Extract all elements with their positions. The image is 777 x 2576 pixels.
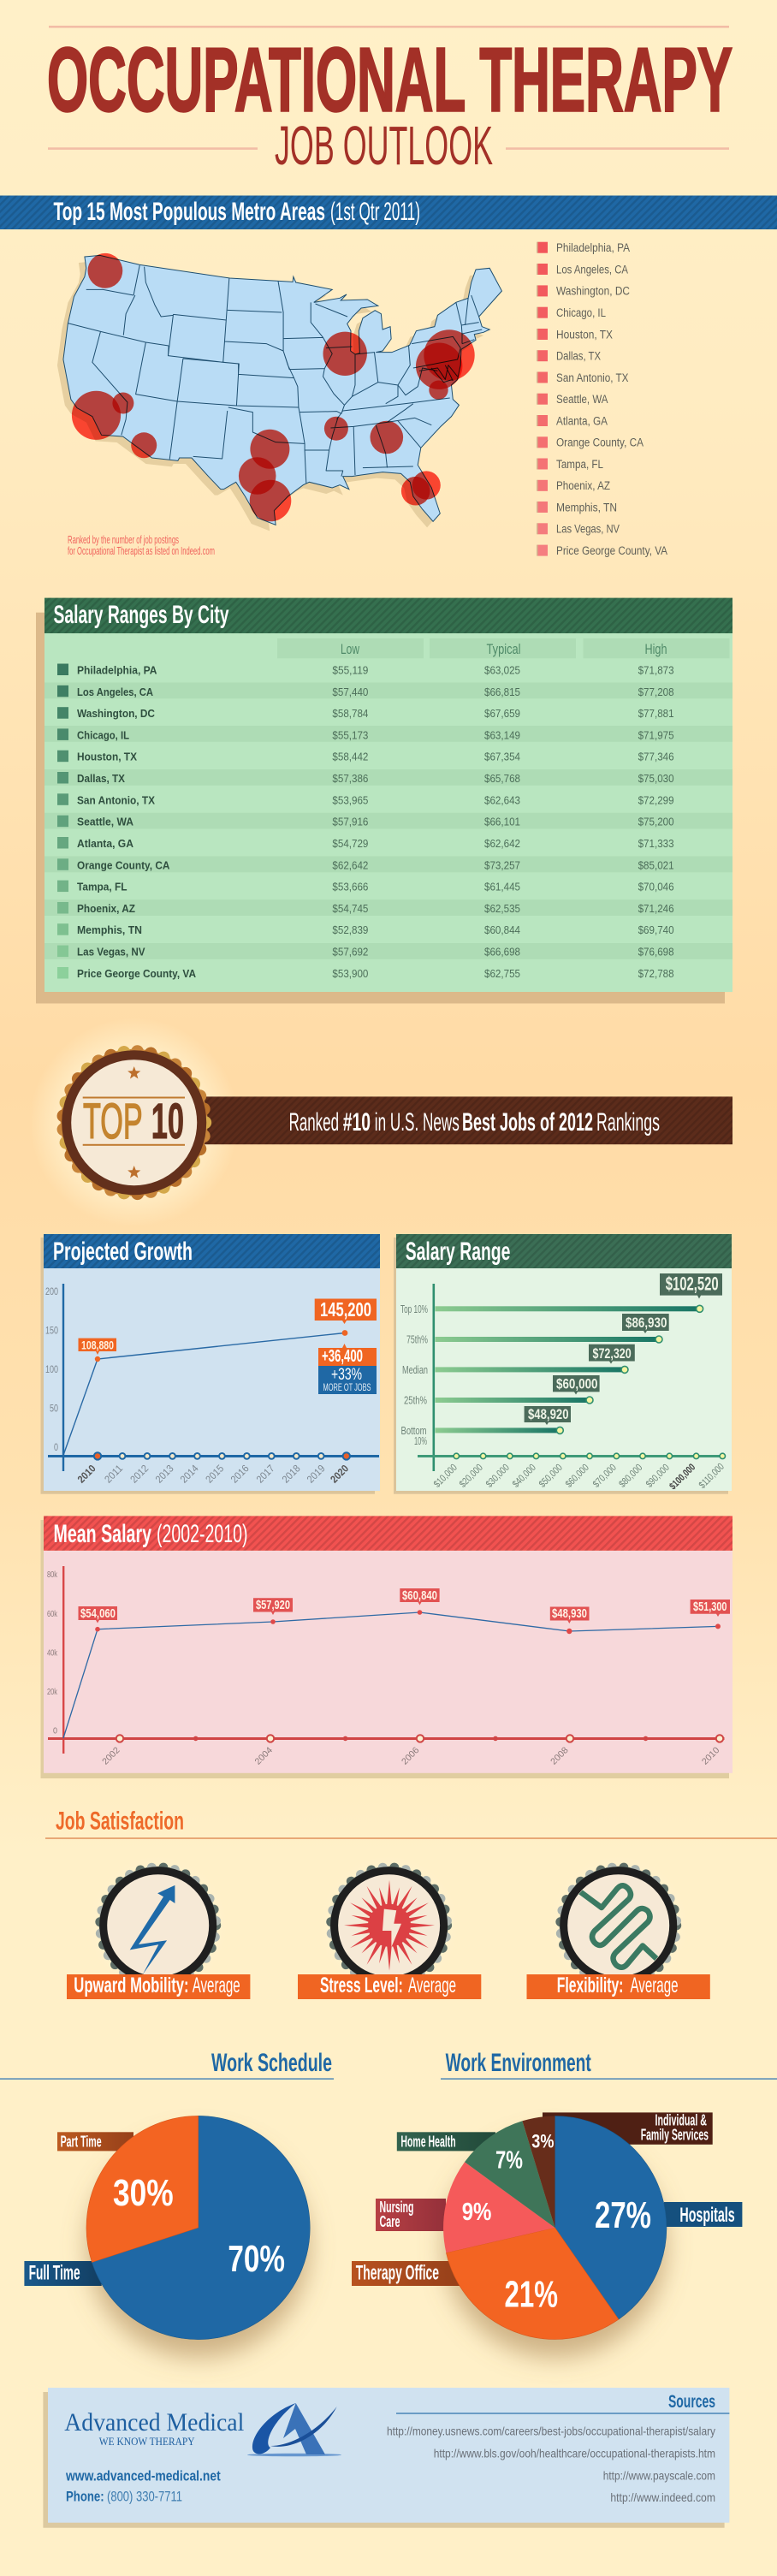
map footnote: for Occupational Therapist as listed on Indeed.com bbox=[68, 545, 215, 557]
label: home health: Home Health bbox=[400, 2134, 456, 2151]
label: therapy office: Therapy Office bbox=[356, 2262, 439, 2285]
callout: +36,400 and +33%: +36,400 bbox=[322, 1347, 363, 1366]
callout: $72,320 bbox=[589, 1344, 635, 1364]
callout: $86,930 bbox=[622, 1314, 669, 1333]
city legend: Dallas, TX bbox=[556, 349, 601, 363]
banner: ranked #10: #10 bbox=[343, 1108, 371, 1137]
table rows: $54,745 bbox=[332, 902, 368, 915]
title: JOB OUTLOOK bbox=[275, 115, 493, 176]
heading: job satisfaction: Job Satisfaction bbox=[56, 1807, 184, 1835]
bar chart: salary percentiles: 75th% bbox=[406, 1333, 428, 1345]
line chart: projected growth: 150 bbox=[45, 1325, 58, 1337]
pie chart: work environment: 9% bbox=[462, 2199, 492, 2226]
pie chart: work environment bbox=[352, 2112, 742, 2358]
callout: $48,930 bbox=[550, 1607, 589, 1623]
table rows: $67,354 bbox=[484, 751, 520, 763]
icon: upward lightning arrow bbox=[130, 1885, 175, 1974]
city legend: San Antonio, TX bbox=[556, 371, 628, 384]
city legend: Houston, TX bbox=[556, 328, 613, 341]
logo: advanced medical: WE KNOW THERAPY bbox=[99, 2436, 195, 2448]
city legend bbox=[537, 241, 667, 557]
callout: $102,520 bbox=[660, 1273, 722, 1299]
table rows: Phoenix, AZ bbox=[77, 902, 135, 915]
table rows: Atlanta, GA bbox=[77, 837, 134, 850]
city legend: Chicago, IL bbox=[556, 306, 606, 319]
line chart: projected growth: 2014 bbox=[178, 1463, 201, 1486]
slice: home health 7% bbox=[465, 2121, 555, 2228]
table rows: Las Vegas, NV bbox=[77, 946, 145, 959]
banner: ranked #10: Ranked bbox=[289, 1108, 339, 1137]
table rows: $57,440 bbox=[332, 686, 368, 698]
bar chart: salary percentiles: $60,000 bbox=[564, 1463, 591, 1490]
callout: $48,920 bbox=[525, 1406, 571, 1425]
table column headers bbox=[277, 638, 729, 658]
table column headers: High bbox=[645, 641, 667, 657]
icon: red starburst with bolt bbox=[344, 1880, 435, 1971]
logo: advanced medical bbox=[64, 2403, 341, 2456]
table rows: $54,729 bbox=[332, 837, 368, 850]
table rows: $72,788 bbox=[638, 967, 674, 980]
heading: work schedule: Work Schedule bbox=[211, 2049, 332, 2077]
line chart: mean salary: 60k bbox=[47, 1609, 58, 1619]
heading: projected growth bbox=[44, 1234, 380, 1268]
table rows: $77,346 bbox=[638, 751, 674, 763]
pie chart: work environment: 21% bbox=[505, 2273, 558, 2315]
callout: $72,320: $72,320 bbox=[592, 1345, 632, 1362]
panel: projected growth bbox=[41, 1234, 380, 1494]
heading: mean salary: (2002-2010) bbox=[157, 1520, 248, 1548]
table rows: Orange County, CA bbox=[77, 858, 170, 871]
label: stress level bbox=[298, 1974, 481, 1999]
label: flexibility bbox=[527, 1974, 710, 1999]
banner: ranked #10 bbox=[171, 1096, 733, 1144]
label: individual and family services: Individual & bbox=[655, 2112, 707, 2129]
bar chart: salary percentiles: $10,000 bbox=[432, 1463, 460, 1490]
table rows: $72,299 bbox=[638, 793, 674, 806]
pie chart: work schedule bbox=[24, 2116, 310, 2358]
bar chart: salary percentiles: $20,000 bbox=[458, 1463, 485, 1490]
table rows: $53,900 bbox=[332, 967, 368, 980]
table rows bbox=[44, 664, 733, 980]
line chart: projected growth: 2013 bbox=[153, 1463, 176, 1486]
table rows: $71,975 bbox=[638, 728, 674, 741]
table column headers: Typical bbox=[486, 641, 520, 657]
table rows: $75,200 bbox=[638, 816, 674, 828]
line chart: projected growth: 2020 bbox=[328, 1463, 351, 1486]
callout: 108,880 bbox=[79, 1338, 116, 1355]
line chart: projected growth: 2019 bbox=[305, 1463, 328, 1486]
contact details: (800) 330-7711 bbox=[107, 2488, 182, 2504]
label: nursing care: Nursing bbox=[380, 2199, 414, 2216]
table rows: $73,257 bbox=[484, 858, 520, 871]
table column headers: Low bbox=[341, 641, 360, 657]
badge: top 10: TOP bbox=[83, 1094, 143, 1149]
slice: individual and family services 3% bbox=[522, 2116, 555, 2228]
logo: advanced medical: Advanced Medical bbox=[64, 2408, 244, 2437]
table rows: $58,442 bbox=[332, 751, 368, 763]
callout: $54,060: $54,060 bbox=[80, 1607, 116, 1621]
slice: part time 30% bbox=[86, 2116, 199, 2262]
table rows: $62,642 bbox=[332, 858, 368, 871]
table rows: $66,101 bbox=[484, 816, 520, 828]
bar chart: salary percentiles: Median bbox=[402, 1363, 428, 1376]
line chart: projected growth: 2010 bbox=[75, 1463, 98, 1486]
line chart: projected growth: 0 bbox=[54, 1441, 58, 1453]
table rows: $62,643 bbox=[484, 793, 520, 806]
table rows: $71,873 bbox=[638, 664, 674, 676]
city legend: Atlanta, GA bbox=[556, 414, 608, 427]
sources list: http://www.bls.gov/ooh/healthcare/occupational-therapists.htm bbox=[434, 2446, 715, 2460]
table rows: $53,965 bbox=[332, 793, 368, 806]
label: flexibility: Average bbox=[630, 1974, 678, 1997]
sources list: http://money.usnews.com/careers/best-jobs/occupational-therapist/salary bbox=[387, 2424, 715, 2437]
line chart: mean salary: 20k bbox=[47, 1687, 58, 1697]
table rows: Chicago, IL bbox=[77, 728, 129, 741]
line chart: projected growth: 2016 bbox=[228, 1463, 252, 1486]
pie chart: work environment: 3% bbox=[531, 2130, 554, 2152]
callout: +36,400 and +33%: MORE OT JOBS bbox=[323, 1381, 371, 1393]
heading: top 15 metro areas band: Top 15 Most Populous Metro Areas bbox=[53, 198, 325, 226]
bar chart: salary percentiles: $40,000 bbox=[511, 1463, 538, 1490]
callout: $48,920: $48,920 bbox=[528, 1406, 568, 1422]
city legend: Los Angeles, CA bbox=[556, 263, 628, 276]
table rows: $61,445 bbox=[484, 881, 520, 893]
bar chart: salary percentiles: $100,000 bbox=[668, 1463, 697, 1492]
table rows: Price George County, VA bbox=[77, 967, 197, 980]
bar chart: salary percentiles bbox=[400, 1284, 727, 1492]
slice: full time 70% bbox=[92, 2116, 310, 2340]
table rows: $52,839 bbox=[332, 923, 368, 936]
table rows: $85,021 bbox=[638, 858, 674, 871]
city legend: Philadelphia, PA bbox=[556, 241, 630, 254]
map footnote: Ranked by the number of job postings bbox=[68, 534, 179, 546]
table rows: $55,173 bbox=[332, 728, 368, 741]
callout: 145,200: 145,200 bbox=[320, 1298, 371, 1321]
table rows: $53,666 bbox=[332, 881, 368, 893]
line chart: mean salary: 2004 bbox=[253, 1745, 275, 1767]
callout: 108,880: 108,880 bbox=[81, 1338, 114, 1352]
badge: top 10: 10 bbox=[151, 1094, 184, 1149]
table rows: $77,881 bbox=[638, 707, 674, 720]
callout: $51,300: $51,300 bbox=[693, 1600, 727, 1614]
callout: +36,400 and +33% bbox=[318, 1344, 377, 1394]
bar chart: salary percentiles: $110,000 bbox=[697, 1462, 727, 1491]
bar chart: salary percentiles: $70,000 bbox=[591, 1463, 619, 1490]
table rows: $77,208 bbox=[638, 686, 674, 698]
city legend: Price George County, VA bbox=[556, 544, 667, 557]
label: hospitals: Hospitals bbox=[679, 2204, 735, 2227]
slice: therapy office 21% bbox=[446, 2228, 619, 2339]
callout: $57,920: $57,920 bbox=[256, 1599, 290, 1612]
panel: mean salary bbox=[41, 1516, 733, 1778]
label: individual and family services bbox=[543, 2112, 713, 2145]
banner: ranked #10: Rankings bbox=[596, 1108, 660, 1137]
heading: top 15 metro areas band bbox=[0, 195, 777, 229]
label: stress level: Average bbox=[408, 1974, 456, 1997]
line chart: mean salary: 2002 bbox=[100, 1745, 122, 1767]
table rows: Los Angeles, CA bbox=[77, 686, 154, 698]
label: individual and family services: Family Services bbox=[641, 2126, 709, 2143]
city legend: Phoenix, AZ bbox=[556, 479, 610, 492]
heading: mean salary: Mean Salary bbox=[53, 1520, 151, 1548]
panel: footer with logo and sources bbox=[43, 2388, 729, 2528]
contact details: Phone: bbox=[66, 2488, 104, 2504]
table rows: $76,698 bbox=[638, 946, 674, 959]
city legend: Tampa, FL bbox=[556, 458, 603, 471]
label: stress level: Stress Level: bbox=[320, 1974, 403, 1997]
bar chart: salary percentiles: 10% bbox=[414, 1434, 427, 1447]
label: therapy office bbox=[352, 2261, 460, 2286]
bar chart: salary percentiles: Top 10% bbox=[400, 1303, 428, 1315]
city legend: Orange County, CA bbox=[556, 436, 644, 449]
table rows: $62,535 bbox=[484, 902, 520, 915]
heading: work environment: Work Environment bbox=[446, 2049, 591, 2077]
callout: $102,520: $102,520 bbox=[666, 1273, 719, 1294]
callout: $48,930: $48,930 bbox=[552, 1607, 587, 1621]
pie chart: work environment: 27% bbox=[595, 2194, 651, 2236]
badge: stress level bbox=[319, 1855, 460, 1996]
line chart: projected growth bbox=[45, 1284, 379, 1486]
bar chart: salary percentiles: $50,000 bbox=[537, 1463, 565, 1490]
label: upward mobility: Average bbox=[193, 1974, 240, 1997]
callout: $60,840 bbox=[400, 1588, 440, 1606]
line chart: projected growth: 50 bbox=[50, 1402, 58, 1414]
banner: ranked #10: in U.S. News bbox=[375, 1108, 460, 1137]
bar chart: salary percentiles: $90,000 bbox=[644, 1463, 672, 1490]
line chart: projected growth: 2012 bbox=[128, 1463, 151, 1486]
table rows: Philadelphia, PA bbox=[77, 664, 157, 676]
line chart: mean salary: 0 bbox=[53, 1725, 57, 1736]
table rows: Dallas, TX bbox=[77, 772, 125, 785]
slice: nursing care 9% bbox=[443, 2162, 555, 2253]
table rows: $69,740 bbox=[638, 923, 674, 936]
city legend: Las Vegas, NV bbox=[556, 523, 620, 536]
table rows: Washington, DC bbox=[77, 707, 156, 720]
table rows: $70,046 bbox=[638, 881, 674, 893]
label: upward mobility: Upward Mobility: bbox=[74, 1974, 189, 1997]
pie chart: work environment: 7% bbox=[495, 2146, 523, 2174]
sources list: http://www.indeed.com bbox=[610, 2490, 715, 2504]
label: hospitals bbox=[664, 2202, 742, 2227]
line chart: projected growth: 2018 bbox=[280, 1463, 303, 1486]
table rows: $57,916 bbox=[332, 816, 368, 828]
label: part time: Part Time bbox=[61, 2134, 102, 2151]
callout: $60,000: $60,000 bbox=[556, 1376, 597, 1392]
line chart: projected growth: 100 bbox=[45, 1363, 58, 1375]
line chart: projected growth: 2011 bbox=[102, 1463, 125, 1486]
line chart: projected growth: 2017 bbox=[254, 1463, 277, 1486]
heading: salary range bbox=[396, 1234, 732, 1268]
contact details bbox=[65, 2467, 221, 2504]
heading: top 15 metro areas band: (1st Qtr 2011) bbox=[330, 198, 420, 226]
line chart: mean salary: 80k bbox=[47, 1570, 58, 1580]
heading: salary range: Salary Range bbox=[406, 1238, 510, 1266]
table rows: $66,698 bbox=[484, 946, 520, 959]
slice: hospitals 27% bbox=[555, 2116, 667, 2319]
banner: ranked #10: Best Jobs of 2012 bbox=[462, 1108, 593, 1137]
table rows: $71,333 bbox=[638, 837, 674, 850]
line chart: mean salary: 2006 bbox=[400, 1745, 422, 1767]
bar chart: salary percentiles: Bottom bbox=[400, 1424, 426, 1437]
label: nursing care bbox=[376, 2199, 446, 2231]
label: full time: Full Time bbox=[29, 2262, 80, 2285]
table rows: $67,659 bbox=[484, 707, 520, 720]
table rows: $71,246 bbox=[638, 902, 674, 915]
label: flexibility: Flexibility: bbox=[557, 1974, 623, 1997]
icon: green serpentine line bbox=[575, 1885, 663, 1968]
table rows: Seattle, WA bbox=[77, 816, 134, 828]
contact details: www.advanced-medical.net bbox=[65, 2467, 221, 2484]
badge: top 10 bbox=[61, 1049, 208, 1196]
table rows: $55,119 bbox=[332, 664, 368, 676]
table rows: $60,844 bbox=[484, 923, 520, 936]
line chart: mean salary: 40k bbox=[47, 1648, 58, 1659]
map of metro areas bbox=[57, 253, 501, 531]
heading: salary ranges by city bbox=[44, 598, 733, 633]
bar chart: salary percentiles: 25th% bbox=[404, 1393, 427, 1407]
pie chart: work schedule: 30% bbox=[113, 2172, 174, 2214]
table rows: $58,784 bbox=[332, 707, 368, 720]
table rows: $63,025 bbox=[484, 664, 520, 676]
table rows: $62,755 bbox=[484, 967, 520, 980]
map footnote bbox=[68, 534, 215, 557]
table rows: $65,768 bbox=[484, 772, 520, 785]
panel: salary range bbox=[394, 1234, 732, 1494]
callout: $86,930: $86,930 bbox=[626, 1315, 667, 1331]
table rows: $63,149 bbox=[484, 728, 520, 741]
line chart: mean salary bbox=[47, 1566, 724, 1767]
bar chart: salary percentiles: $80,000 bbox=[617, 1463, 644, 1490]
panel: salary ranges by city bbox=[36, 598, 733, 1003]
bar chart: salary percentiles: $30,000 bbox=[484, 1463, 512, 1490]
sources list: Sources bbox=[668, 2392, 715, 2412]
heading: mean salary bbox=[44, 1516, 733, 1551]
callout: $51,300 bbox=[691, 1600, 730, 1617]
city legend: Washington, DC bbox=[556, 285, 630, 298]
heading: salary ranges by city: Salary Ranges By City bbox=[53, 601, 229, 629]
callout: 145,200 bbox=[315, 1298, 377, 1324]
city legend: Seattle, WA bbox=[556, 393, 608, 406]
label: nursing care: Care bbox=[380, 2213, 400, 2230]
badge: upward mobility bbox=[88, 1855, 228, 1996]
callout: $60,000 bbox=[553, 1375, 600, 1395]
callout: +36,400 and +33%: +33% bbox=[331, 1366, 362, 1384]
table rows: $57,692 bbox=[332, 946, 368, 959]
table rows: $66,815 bbox=[484, 686, 520, 698]
line chart: projected growth: 2015 bbox=[203, 1463, 226, 1486]
sources list bbox=[387, 2392, 729, 2504]
badge glow bbox=[30, 1018, 239, 1227]
callout: $60,840: $60,840 bbox=[402, 1589, 437, 1603]
table rows: Memphis, TN bbox=[77, 923, 142, 936]
callout: $57,920 bbox=[253, 1598, 293, 1615]
line chart: projected growth: 200 bbox=[45, 1285, 58, 1297]
table rows: $75,030 bbox=[638, 772, 674, 785]
line chart: mean salary: 2008 bbox=[549, 1745, 571, 1767]
pie chart: work schedule: 70% bbox=[228, 2238, 285, 2280]
table rows: $57,386 bbox=[332, 772, 368, 785]
city legend: Memphis, TN bbox=[556, 501, 617, 513]
line chart: mean salary: 2010 bbox=[700, 1745, 721, 1767]
table rows: San Antonio, TX bbox=[77, 793, 155, 806]
callout: $54,060 bbox=[79, 1606, 117, 1623]
badge: flexibility bbox=[555, 1862, 681, 1974]
table rows: Houston, TX bbox=[77, 751, 137, 763]
title bbox=[47, 26, 733, 176]
heading: projected growth: Projected Growth bbox=[53, 1238, 193, 1266]
table rows: Tampa, FL bbox=[77, 881, 128, 893]
sources list: http://www.payscale.com bbox=[603, 2468, 715, 2482]
table rows: $62,642 bbox=[484, 837, 520, 850]
